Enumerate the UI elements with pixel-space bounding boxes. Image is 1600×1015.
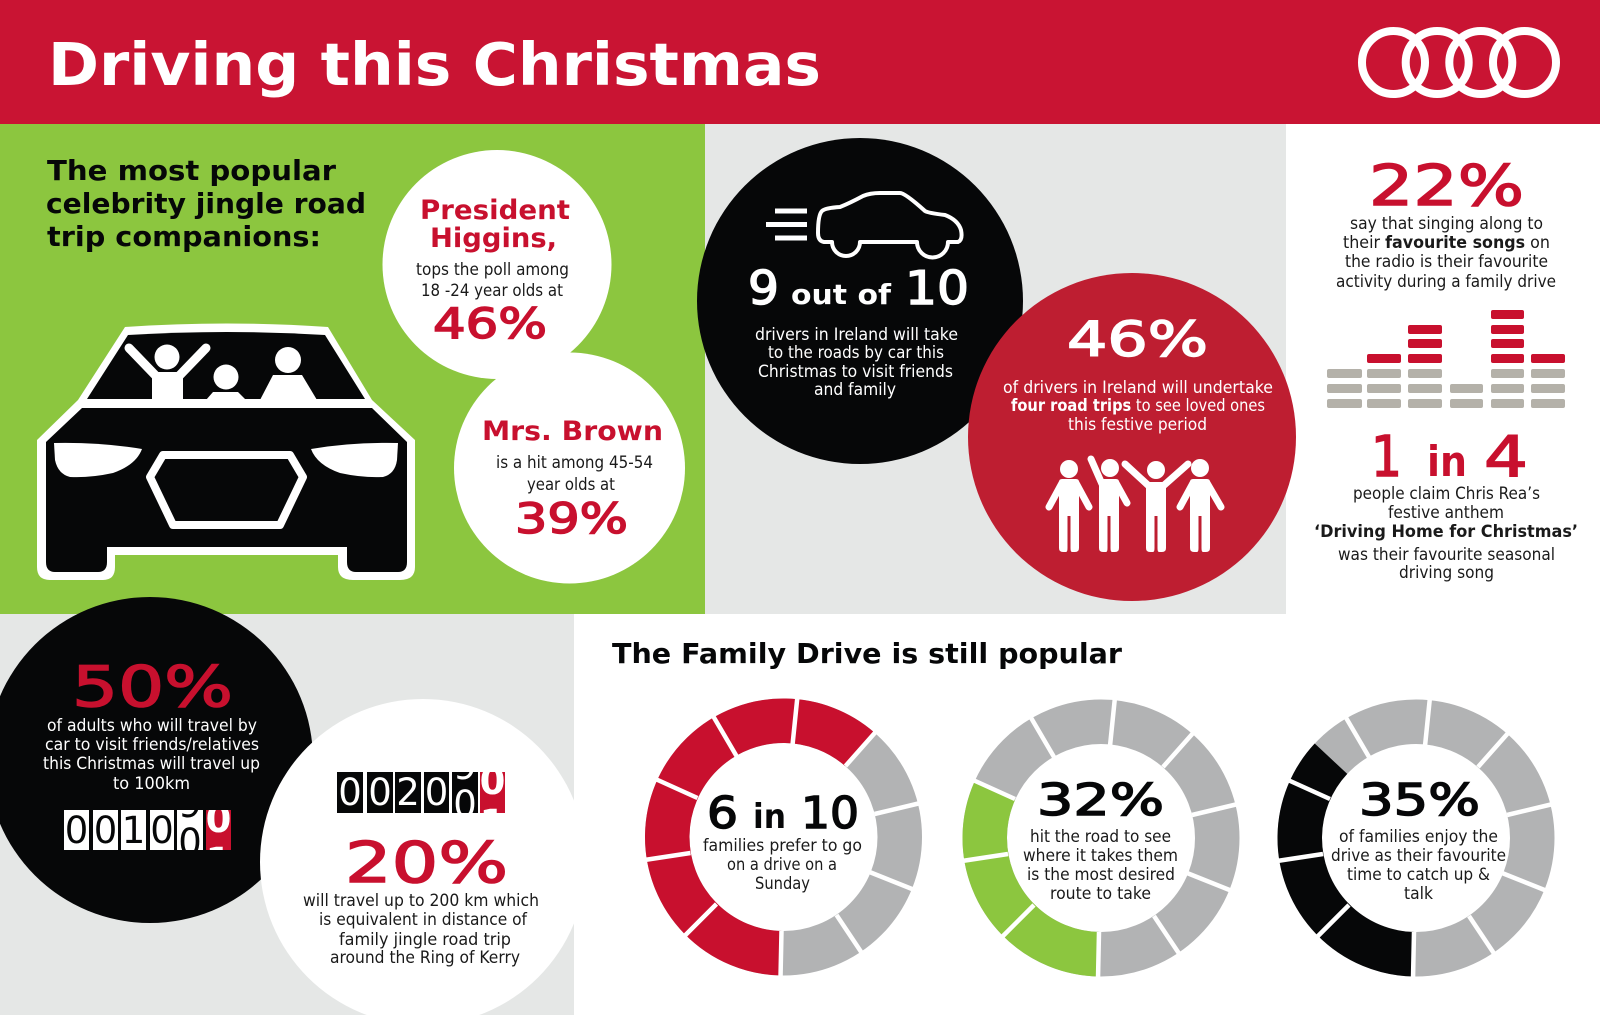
callout: 9 out of 10 drivers: out of	[791, 278, 892, 311]
callout: President Higgins: 18 -24 year olds at	[421, 281, 563, 300]
callout: Mrs. Brown: is a hit among 45-54	[496, 453, 653, 472]
odometer: 00200 km	[337, 772, 505, 813]
callout: 9 out of 10 drivers	[697, 138, 1023, 464]
odometer: 00200 km: 0	[425, 771, 448, 814]
donut: 32% see where it takes them: hit the road to see	[1030, 827, 1171, 846]
stat: 22% favourite songs: say that singing along to	[1350, 214, 1543, 233]
heading: celebrity jingle companions: The most popular	[47, 154, 336, 187]
stat: 1 in 4 Driving Home for Christmas: festive anthem	[1388, 503, 1504, 522]
donut: 32% see where it takes them: where it takes them	[1023, 846, 1178, 865]
callout: President Higgins: 46%	[433, 299, 547, 348]
callout: 9 out of 10 drivers: 9	[748, 261, 779, 315]
callout: 46% four road trips: four road trips to see loved ones	[1011, 396, 1265, 415]
callout: 46% four road trips: this festive period	[1068, 415, 1207, 434]
donut: 35% time to catch up	[1277, 697, 1553, 979]
callout: 20% up to 200 km: 20%	[345, 831, 508, 896]
stat: 22% favourite songs: their favourite songs on	[1343, 233, 1550, 252]
callout: Mrs. Brown: year olds at	[527, 475, 615, 494]
callout: 46% four road trips	[968, 273, 1296, 601]
callout: 20% up to 200 km: family jingle road trip	[339, 930, 511, 949]
donut: 32% see where it takes them: 32%	[1037, 775, 1164, 826]
callout: 9 out of 10 drivers: drivers in Ireland will take	[755, 325, 958, 344]
donut: 35% time to catch up: drive as their favourite	[1331, 846, 1506, 865]
donut: 6 in 10 families: 6	[707, 788, 738, 839]
stat: 22% favourite songs: the radio is their favourite	[1345, 252, 1548, 271]
stat: 22% favourite songs	[1336, 154, 1556, 291]
odometer: 00100 km: 0	[94, 809, 117, 852]
callout: 50% up to 100km: of adults who will travel by	[47, 716, 257, 735]
stat: 1 in 4 Driving Home for Christmas: was their favourite seasonal	[1338, 545, 1555, 564]
stat: 1 in 4 Driving Home for Christmas: 1	[1371, 425, 1402, 490]
donut: 35% time to catch up: of families enjoy the	[1339, 827, 1498, 846]
stat: 1 in 4 Driving Home for Christmas: in	[1427, 437, 1467, 486]
donut: 6 in 10 families: families prefer to go	[703, 836, 862, 855]
donut: 6 in 10 families: in	[753, 797, 786, 837]
odometer: 00200 km: 0	[453, 783, 477, 826]
callout: 9 out of 10 drivers: 10	[905, 261, 969, 315]
callout: 20% up to 200 km: is equivalent in distance of	[319, 910, 528, 929]
callout: 9 out of 10 drivers: to the roads by car this	[768, 343, 944, 362]
stat: 1 in 4 Driving Home for Christmas: people claim Chris Rea’s	[1353, 484, 1540, 503]
stat: 22% favourite songs: activity during a family drive	[1336, 272, 1556, 291]
stat: 1 in 4 Driving Home for Christmas: driving song	[1399, 563, 1494, 582]
callout: President Higgins: Higgins,	[430, 223, 557, 254]
odometer: 00200 km: 1	[480, 802, 505, 845]
icon: front view car with passengers	[37, 324, 415, 580]
stat: 1 in 4 Driving Home for Christmas: ‘Driving Home for Christmas’	[1314, 522, 1578, 541]
donut: 32% see where it takes them: route to take	[1050, 884, 1151, 903]
odometer: 00100 km: 0	[65, 809, 88, 852]
odometer: 00100 km	[64, 810, 231, 850]
callout: 9 out of 10 drivers: and family	[814, 380, 896, 399]
callout: President Higgins: President	[420, 195, 570, 226]
icon: equaliser bars	[1327, 310, 1565, 408]
heading: celebrity jingle companions: celebrity jingle road	[46, 187, 366, 220]
stat: 22% favourite songs: 22%	[1369, 154, 1524, 219]
donut: 6 in 10 families: Sunday	[755, 874, 810, 893]
icon: group of four people	[1049, 459, 1221, 552]
odometer: 00200 km: 0	[480, 760, 505, 803]
odometer: 00100 km: 0	[178, 821, 202, 864]
donut: 35% time to catch up: time to catch up &	[1347, 865, 1490, 884]
callout: 46% four road trips: of drivers in Ireland will undertake	[1003, 378, 1273, 397]
title: Driving this Christmas	[48, 30, 821, 99]
donut: 35% time to catch up: 35%	[1359, 775, 1480, 826]
odometer: 00100 km: 0	[206, 798, 231, 841]
panel: green companions background	[0, 124, 705, 614]
donut: 6 in 10 families: 10	[801, 788, 859, 839]
donut: 6 in 10 families: on a drive on a	[727, 855, 837, 874]
icon: moving car	[766, 193, 962, 258]
donut: 6 in 10 families	[644, 696, 920, 978]
callout: 50% up to 100km: to 100km	[113, 774, 190, 793]
callout: 20% up to 200 km: will travel up to 200 km which	[303, 891, 539, 910]
callout: 50% up to 100km: 50%	[72, 655, 233, 720]
heading: The Family Drive: The Family Drive is still popular	[612, 637, 1122, 670]
callout: 50% up to 100km	[0, 597, 313, 923]
donut: 32% see where it takes them	[962, 697, 1238, 979]
callout: President Higgins	[382, 150, 612, 379]
callout: 20% up to 200 km: around the Ring of Kerry	[330, 948, 520, 967]
callout: Mrs. Brown: Mrs. Brown	[482, 416, 663, 447]
callout: 50% up to 100km: this Christmas will travel up	[43, 754, 260, 773]
callout: Mrs. Brown: 39%	[515, 494, 628, 543]
donut: 35% time to catch up: talk	[1404, 884, 1433, 903]
odometer: 00200 km: 9	[453, 745, 477, 788]
heading: celebrity jingle companions	[46, 154, 366, 253]
stat: 1 in 4 Driving Home for Christmas	[1314, 425, 1578, 582]
odometer: 00100 km: 0	[150, 809, 174, 852]
donut: 32% see where it takes them: is the most desired	[1027, 865, 1175, 884]
odometer: 00200 km: 0	[368, 771, 392, 814]
callout: President Higgins: tops the poll among	[416, 260, 569, 279]
odometer: 00100 km: 1	[206, 840, 231, 883]
panel: grey centre background	[705, 124, 1286, 614]
panel: grey bottom-left background	[0, 614, 574, 1015]
odometer: 00200 km: 2	[396, 771, 420, 814]
header banner	[0, 0, 1600, 124]
odometer: 00100 km: 9	[178, 783, 202, 826]
callout: 46% four road trips: 46%	[1067, 312, 1208, 368]
stat: 1 in 4 Driving Home for Christmas: 4	[1484, 425, 1528, 490]
heading: celebrity jingle companions: trip companions:	[47, 220, 321, 253]
odometer: 00200 km: 0	[338, 771, 362, 814]
callout: 9 out of 10 drivers: Christmas to visit friends	[758, 362, 953, 381]
callout: Mrs. Brown	[454, 352, 685, 584]
odometer: 00100 km: 1	[122, 809, 145, 852]
icon: four rings logo	[1362, 31, 1556, 94]
callout: 20% up to 200 km	[260, 699, 586, 1015]
callout: 50% up to 100km: car to visit friends/relatives	[45, 735, 259, 754]
